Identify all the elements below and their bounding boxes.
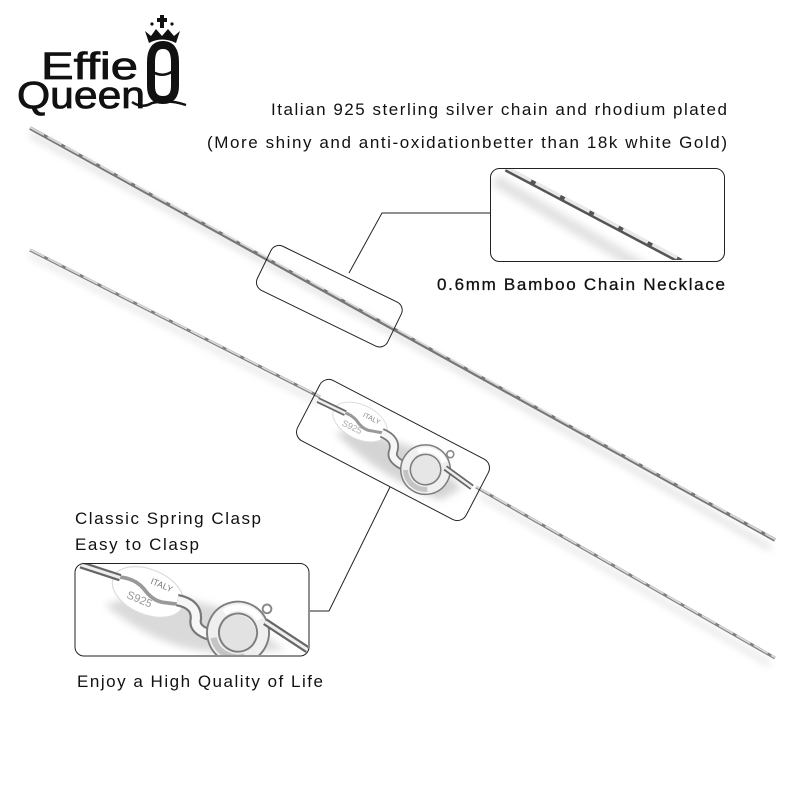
inset clasp links — [80, 564, 122, 582]
chain: upper necklace — [30, 127, 775, 548]
text: material line 1: Italian 925 sterling silver chain and rhodium plated — [271, 100, 727, 119]
inset clasp tag — [112, 566, 184, 617]
clasp links — [318, 396, 345, 418]
clasp photo in chain — [309, 370, 482, 515]
leader line: clasp — [310, 487, 390, 611]
clasp tag: ITALY — [362, 412, 381, 427]
clasp tag: S925 — [340, 418, 364, 436]
leader line: chain — [349, 213, 490, 273]
clasp tag — [326, 394, 394, 450]
clasp ring — [398, 442, 453, 498]
text: material line 2: (More shiny and anti-oxidationbetter than 18k white Gold) — [207, 133, 727, 152]
logo word Effie: Effie — [41, 46, 138, 88]
clasp shadow — [335, 430, 462, 500]
logo big Q — [132, 45, 186, 106]
inset clasp ring — [206, 600, 270, 655]
chain: lower necklace left part — [30, 250, 320, 403]
logo: Effie Queen — [17, 15, 186, 117]
text: chain caption: 0.6mm Bamboo Chain Necklace — [437, 275, 725, 294]
text: clasp caption line 1: Classic Spring Clasp — [75, 509, 261, 528]
inset panel: chain closeup — [490, 168, 724, 272]
text: quality caption: Enjoy a High Quality of Life — [77, 672, 323, 691]
icon: crown — [145, 15, 180, 43]
logo word Queen: Queen — [17, 75, 145, 117]
callout frame: chain detail — [253, 242, 405, 350]
callout frame: clasp detail — [293, 376, 493, 524]
text: clasp caption line 2: Easy to Clasp — [75, 535, 199, 554]
chain: lower necklace right part — [476, 486, 775, 664]
inset clasp tag: S925 — [125, 589, 154, 611]
inset clasp tag: ITALY — [149, 576, 174, 594]
inset panel: clasp closeup — [74, 563, 310, 656]
